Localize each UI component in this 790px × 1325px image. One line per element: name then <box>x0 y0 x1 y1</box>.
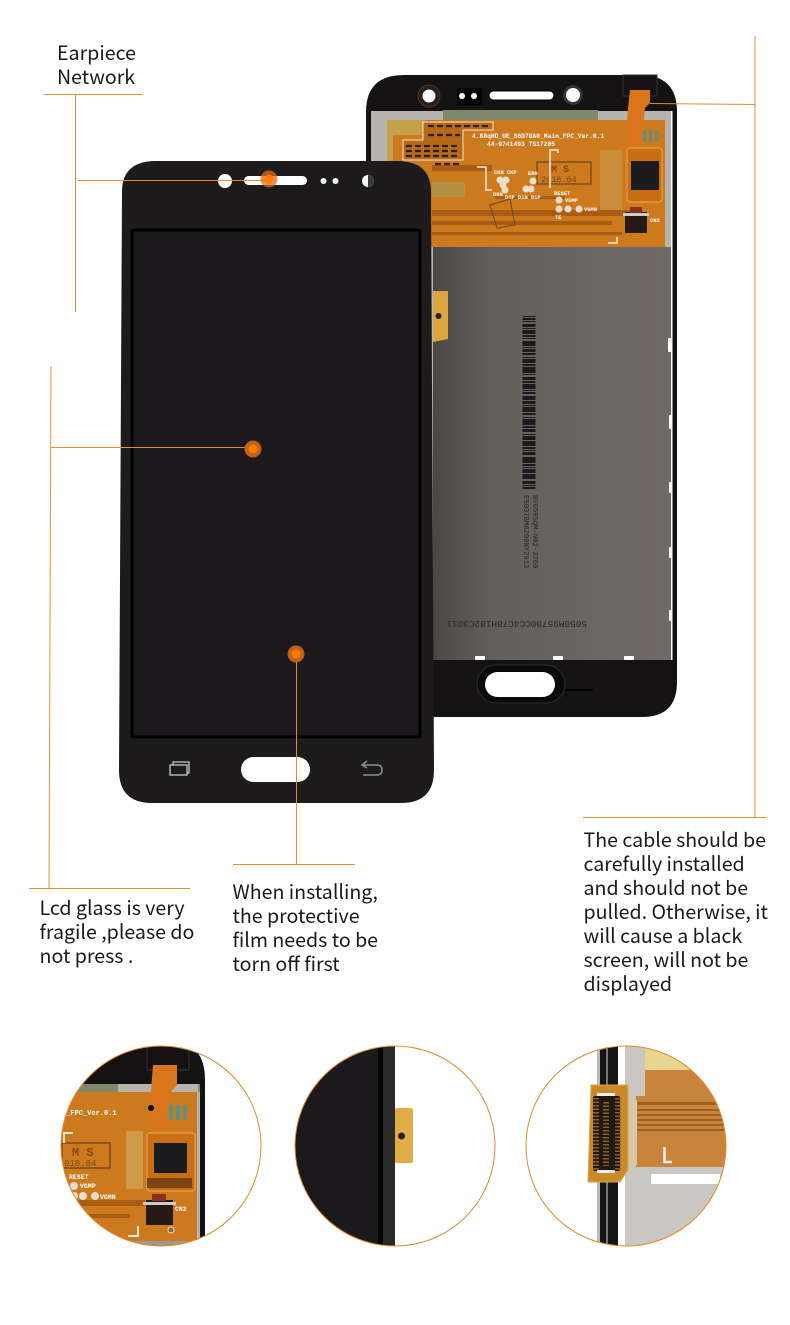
cable leader lines <box>583 36 767 818</box>
front camera <box>362 175 374 187</box>
front of the LCD assembly <box>119 161 434 803</box>
connector CN2 <box>623 207 649 233</box>
small pad labels: ER0 <box>528 171 538 177</box>
right edge strip <box>671 111 672 660</box>
front speaker slot <box>244 176 307 185</box>
tab contents <box>295 1045 413 1247</box>
small pad labels: VGMP <box>565 198 578 204</box>
speaker slot <box>489 91 554 100</box>
small pad labels: D1N D1P <box>518 195 541 201</box>
tab circle outline <box>295 1046 495 1246</box>
small pad labels: TE <box>555 215 562 221</box>
glass leader lines <box>29 366 253 888</box>
front phone body <box>119 161 434 803</box>
earpiece leader lines <box>44 94 269 312</box>
white alignment corners <box>477 150 617 243</box>
date stamp <box>537 162 591 185</box>
silver frame <box>371 111 672 660</box>
cable text: will cause a black <box>584 920 742 949</box>
barcode <box>522 316 536 489</box>
component outlined area <box>403 122 493 160</box>
earpiece marker <box>260 170 278 188</box>
board contents: CN2 <box>175 1206 187 1213</box>
flex serial text: 44-9741493 TS17205 <box>487 141 555 148</box>
detail circle: connector <box>526 1045 727 1247</box>
cable notch <box>623 75 657 96</box>
callout: earpiece network <box>44 37 278 312</box>
front home button <box>241 757 310 782</box>
chip board <box>627 148 662 202</box>
sensor dots <box>320 178 338 184</box>
film text: torn off first <box>232 948 340 977</box>
small pad labels: CKN CKP <box>494 170 517 176</box>
board contents: VGMP <box>80 1183 96 1190</box>
panel serial number: 5050M95700CC4C78H182C3011 <box>446 618 587 629</box>
board contents <box>62 1046 205 1246</box>
cable text: and should not be <box>584 872 748 901</box>
earpiece label: Network <box>57 61 135 90</box>
callout: cable warning <box>583 36 769 997</box>
front left hole <box>218 174 232 188</box>
back of the LCD assembly <box>366 75 677 717</box>
small pad labels: DOP <box>505 195 515 201</box>
board contents: 018.04 <box>64 1159 96 1169</box>
glass marker <box>244 440 262 458</box>
resistors <box>643 130 658 142</box>
film text: film needs to be <box>232 924 378 953</box>
back phone body <box>366 75 677 717</box>
right hole <box>563 85 583 105</box>
recents icon <box>170 762 189 775</box>
barcode caption second line: E5037BM6200NY2913 <box>521 495 529 568</box>
stamp mark <box>490 199 515 228</box>
board contents: VGMN <box>100 1194 116 1201</box>
date stamp: 2018.04 <box>541 175 577 185</box>
small pad labels: DON <box>493 192 503 198</box>
component pads <box>406 126 490 164</box>
back home button <box>477 665 565 703</box>
glass text: fragile ,please do <box>40 916 194 945</box>
yellow tape tab <box>433 291 448 342</box>
cable text: pulled. Otherwise, it <box>584 896 769 925</box>
callout: fragile glass <box>29 366 262 969</box>
cable text: carefully installed <box>584 848 745 877</box>
film text: the protective <box>232 900 360 929</box>
driver chip <box>631 161 659 190</box>
connector contents <box>588 1045 727 1247</box>
small pad labels: CN2 <box>650 218 660 224</box>
small pad labels: RESET <box>554 191 571 197</box>
barcode caption: BV050SQM-N02-3260 <box>530 495 538 568</box>
ribbon tail <box>625 90 650 155</box>
connector circle outline <box>526 1046 726 1246</box>
earpiece label: Earpiece <box>57 37 136 66</box>
small pad labels: VGMN <box>584 207 597 213</box>
LCD panel back <box>433 247 671 660</box>
film leader lines <box>233 654 355 864</box>
tan corner <box>387 120 425 165</box>
darker traces <box>432 150 632 235</box>
film text: When installing, <box>232 876 378 905</box>
display area <box>132 230 420 737</box>
sensor window <box>457 88 482 105</box>
flex part number text: 4.88qHD_UE_S6D78A0_Main_FPC_Ver.0.1 <box>472 133 604 140</box>
back small line <box>565 689 593 691</box>
top hole camera <box>418 85 440 107</box>
back icon <box>362 761 382 775</box>
glass text: Lcd glass is very <box>40 892 185 921</box>
detail circle: yellow tab <box>295 1045 495 1247</box>
glass text: not press . <box>40 940 133 969</box>
solder pads <box>496 176 582 212</box>
film marker <box>288 646 304 662</box>
green strip <box>443 110 598 121</box>
cable text: displayed <box>584 968 672 997</box>
board contents: RESET <box>69 1174 89 1181</box>
board circle outline <box>61 1046 261 1246</box>
date stamp: M S <box>551 165 569 176</box>
small pad labels <box>493 170 660 224</box>
board contents: n_FPC_Ver.0.1 <box>62 1110 117 1118</box>
orange flexible circuit <box>387 120 665 247</box>
callout: protective film <box>232 646 378 977</box>
board contents: M S <box>72 1146 94 1160</box>
cable text: screen, will not be <box>584 944 749 973</box>
cable text: The cable should be <box>584 824 766 853</box>
right tabs <box>475 338 672 660</box>
detail circle: circuit board <box>60 1045 262 1249</box>
